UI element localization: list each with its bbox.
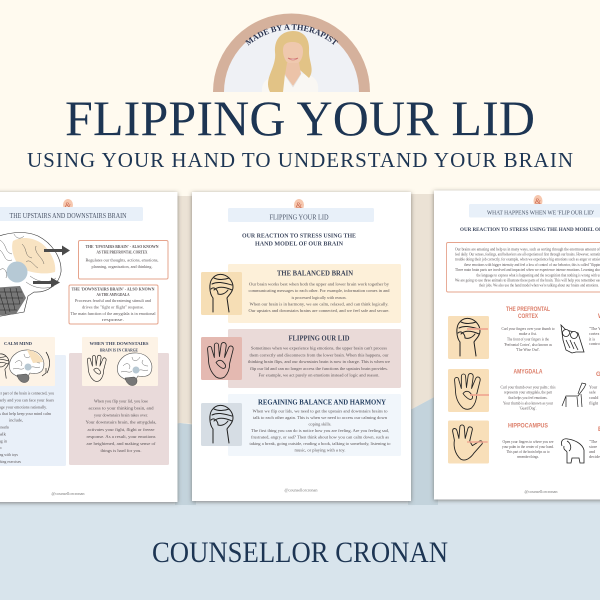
- row: amygdala: [448, 369, 600, 412]
- panel: the balanced brain: THE BALANCED BRAIN: [277, 270, 353, 278]
- icon: guard dog: [562, 383, 586, 407]
- row: hippocampus: and: [589, 449, 596, 454]
- panel: calm mind: include,: [9, 418, 23, 424]
- arrow: to downstairs brain: [33, 278, 60, 288]
- panel: the balanced brain: When our brain is in harmony, we are calm, relaxed, and can think logically.: [250, 302, 388, 308]
- icon: flipped brain: [117, 353, 152, 386]
- panel: flipping your lid worksheet: [192, 192, 411, 501]
- row: hippocampus: your palm in the center of your hand.: [502, 444, 554, 449]
- row: hippocampus: This part of the brain helps us to: [506, 449, 550, 454]
- panel: regaining balance and harmony: [201, 394, 401, 456]
- row: hippocampus: store: [589, 444, 597, 449]
- badge: made by a therapist arch: [213, 14, 370, 92]
- subheading: [242, 234, 356, 248]
- panel: the balanced brain: is processed logically with reason.: [292, 295, 346, 300]
- panel: when the downstairs brain is in charge: access to your thinking brain, and: [88, 406, 154, 412]
- icon: open hand: [87, 355, 106, 381]
- panel: when the downstairs brain is in charge: BRAIN IS IN CHARGE: [100, 348, 138, 352]
- row: amygdala: safe: [589, 390, 596, 394]
- badge text: MADE BY A THERAPIST: [245, 24, 338, 46]
- panel: the balanced brain: Our brain works best when both the upper and lower brain work together by: [249, 282, 390, 286]
- arrow: to upstairs brain: [44, 246, 70, 256]
- panel: regaining balance and harmony: The first thing you can do is notice how you are feeling. Are you feeling sad,: [251, 428, 389, 434]
- row: the prefrontal cortex: The front of your fingers is the: [507, 336, 549, 342]
- row: the prefrontal cortex: Curl your fingers over your thumb to: [502, 326, 554, 331]
- panel: flipping our lid: For example, we act purely on emotions instead of logic and reason.: [258, 372, 380, 378]
- row: the prefrontal cortex: THE PREFRONTAL: [506, 307, 550, 313]
- icon: hand with arrow: [455, 374, 480, 409]
- logo: &: [535, 197, 542, 206]
- callout: upstairs brain: THE 'UPSTAIRS BRAIN' - ALSO KNOWN: [86, 244, 158, 249]
- row: amygdala: that helps you feel emotions.: [508, 395, 548, 400]
- gaps: shaded blue between cards: [175, 395, 438, 505]
- heading bar: [228, 208, 374, 222]
- row: amygdala: Curl your thumb over your palm ; this: [500, 384, 556, 390]
- panel: flipping our lid: FLIPPING OUR LID: [288, 334, 350, 342]
- handle: @counsellorcronan: [524, 489, 558, 494]
- panel: when the downstairs brain is in charge: are heightened, and making sense of: [86, 441, 156, 447]
- gaps: beige between cards: [175, 194, 438, 424]
- callout: introduction: [446, 242, 600, 292]
- row: hippocampus: decide: [589, 454, 600, 459]
- icon: fist: [210, 274, 233, 312]
- icon: calm brain: [9, 350, 44, 383]
- panel: regaining balance and harmony: coping skills.: [308, 422, 332, 426]
- panel: when the downstairs brain is in charge: [69, 337, 169, 465]
- handle: @counsellorcronan: [52, 491, 85, 496]
- callout: downstairs brain: The main function of the amygdala is in emotional: [70, 311, 156, 316]
- panel: the balanced brain: Our upstairs and downstairs brains are connected, and we feel safe and secure.: [248, 308, 390, 314]
- logo: [63, 199, 73, 211]
- panel: when the downstairs brain is in charge: things is hard for you.: [100, 448, 142, 453]
- panel: the balanced brain: communicating messages to each other. For example, information comes in and: [248, 288, 390, 294]
- panel: regaining balance and harmony: taking a break, going outside, reading a book, talking to somebody, listening to: [250, 441, 391, 447]
- callout: downstairs brain: AS THE AMYGDALA: [96, 292, 130, 297]
- callout: downstairs brain: response.: [102, 317, 124, 322]
- logo: &: [65, 201, 72, 210]
- callout: downstairs brain: Processes fearful and threatening stimuli and: [75, 298, 152, 303]
- row: amygdala: Your thumb is also known as your: [503, 400, 554, 406]
- panel: when the downstairs brain is in charge: Your downstairs brain, the amygdala,: [86, 420, 156, 426]
- icon: elephant: [561, 439, 584, 463]
- callout: upstairs brain: [78, 240, 168, 279]
- icon: open hand: [208, 343, 233, 378]
- row: amygdala: Your: [589, 384, 598, 390]
- panel: when the downstairs brain is in charge: your downstairs brain takes over.: [94, 412, 148, 418]
- icon: fist: [0, 354, 9, 378]
- handle: @counsellorcronan: [284, 488, 318, 492]
- panel: flipping our lid: [201, 329, 401, 388]
- logo: [294, 199, 304, 211]
- heading bar: [0, 207, 143, 221]
- callout: downstairs brain: drives the "fight or flight" response.: [82, 304, 144, 310]
- logo: [534, 195, 542, 207]
- icon: open hand with arrow: [453, 425, 488, 460]
- brain diagram: [0, 233, 61, 318]
- row: amygdala: 'Guard Dog'.: [520, 406, 536, 410]
- icon: owl: [561, 325, 584, 353]
- subtitle: USING YOUR HAND TO UNDERSTAND YOUR BRAIN: [27, 148, 573, 172]
- subheading: OUR REACTION TO STRESS USING THE: [242, 234, 356, 240]
- footer brand name: COUNSELLOR CRONAN: [152, 536, 448, 569]
- row: the prefrontal cortex: 'Prefrontal Cortex', also known as: [504, 342, 552, 348]
- heading bar: [469, 204, 600, 218]
- row: hippocampus: "The: [589, 439, 597, 444]
- panel: regaining balance and harmony: talk to each other again. This is when we need to access our calming down: [253, 415, 388, 420]
- callout: upstairs brain: Regulates our thoughts, actions, emotions,: [86, 258, 158, 264]
- row: the prefrontal cortex: 'The Wise Owl'.: [516, 347, 540, 352]
- panel: what happens when we flip our lid worksheet: [434, 190, 600, 500]
- panel: flipping our lid: Sometimes when we experience big emotions, the upper brain can't process: [251, 346, 387, 352]
- row: hippocampus: HIPPOCAMPUS: [508, 424, 548, 430]
- callout: downstairs brain: [69, 285, 158, 324]
- row: hippocampus: [448, 420, 600, 464]
- panel: flipping our lid: them correctly and disconnects from the lower brain. When this happens, our: [250, 352, 389, 358]
- callout: upstairs brain: planning, organisation, and thinking.: [92, 264, 152, 270]
- subheading: HAND MODEL OF OUR BRAIN: [255, 242, 344, 248]
- portrait: therapist photo: [262, 31, 318, 92]
- icon: fist with arrow: [457, 318, 480, 356]
- row: amygdala: could: [589, 395, 599, 400]
- panel: when the downstairs brain is in charge: WHEN THE DOWNSTAIRS: [90, 341, 149, 346]
- panel: regaining balance and harmony: music, or playing with a toy.: [294, 448, 346, 454]
- panel: flipping our lid: thinking brain flips, and our downstairs brain is now in charge. This is when we: [248, 359, 390, 365]
- row: the prefrontal cortex: CORTEX: [518, 314, 538, 320]
- panel: when the downstairs brain is in charge: response. As a result, your emotions: [86, 434, 156, 440]
- row: amygdala: represents your amygdala, the part: [504, 390, 553, 396]
- background: blue wave: [0, 384, 600, 600]
- calm mind heading: CALM MIND: [4, 341, 33, 346]
- cycle arrows: [42, 352, 50, 376]
- panel: the balanced brain: [201, 264, 401, 323]
- panel: when the downstairs brain is in charge: activates your fight, flight or freeze: [88, 427, 154, 433]
- row: the prefrontal cortex: [448, 307, 600, 359]
- row: hippocampus: Open your fingers to where you see: [502, 439, 554, 444]
- panel: calm mind: [0, 337, 66, 466]
- panel: regaining balance and harmony: frustrated, angry, or sad? Then think about how you can calm down, such as: [251, 434, 389, 440]
- row: amygdala: AMYGDALA: [514, 370, 543, 376]
- callout: downstairs brain: THE 'DOWNSTAIRS BRAIN' - ALSO KNOWN: [72, 286, 154, 292]
- callout: upstairs brain: AS THE PREFRONTAL CORTEX: [96, 250, 148, 254]
- panel: flipping our lid: flip our lid and can no longer access the functions the upstairs brain provides.: [250, 366, 388, 371]
- title: FLIPPING YOUR LID: [65, 90, 535, 146]
- row: amygdala: flight: [589, 400, 599, 406]
- row: the prefrontal cortex: make a fist.: [519, 331, 537, 336]
- logo: &: [296, 201, 303, 210]
- row: the prefrontal cortex: it is: [589, 336, 596, 342]
- panel: upstairs and downstairs worksheet: [0, 192, 178, 502]
- icon: fist: [210, 405, 233, 443]
- row: hippocampus: remember things.: [517, 454, 539, 459]
- heading bar: FLIPPING YOUR LID: [270, 212, 329, 222]
- panel: when the downstairs brain is in charge: When you flip your lid, you lose: [94, 398, 148, 404]
- panel: regaining balance and harmony: REGAINING BALANCE AND HARMONY: [258, 398, 386, 406]
- heading bar: THE UPSTAIRS AND DOWNSTAIRS BRAIN: [10, 211, 127, 220]
- panel: regaining balance and harmony: When we flip our lids, we need to get the upstairs and downstairs brains to: [252, 408, 388, 414]
